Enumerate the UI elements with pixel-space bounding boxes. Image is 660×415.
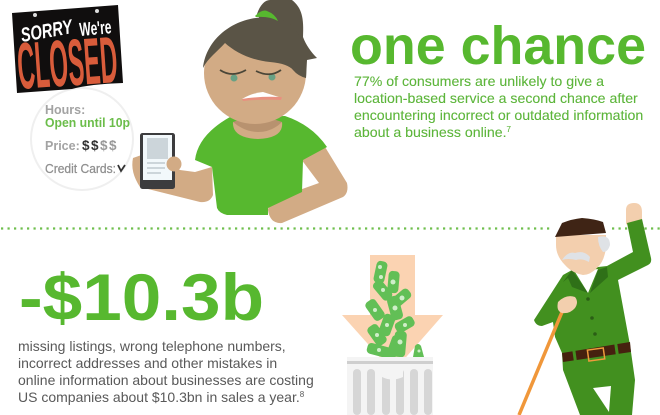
text: price: $$ [100,138,118,153]
text: losses description: 8 [300,390,305,399]
infographic canvas: CLOSED [15,22,120,103]
raised hand [626,203,642,226]
text: losses description: missing listings, wrong telephone numbers, [18,338,286,354]
icon: sorry we're closed sign [12,5,123,103]
money bills [364,260,424,360]
phone [140,133,175,189]
thumb [166,156,182,172]
head [556,235,606,275]
icon: sorry we're closed sign: We're [79,17,112,41]
right arm [268,142,348,223]
gap between legs [593,386,611,412]
neck [233,122,282,139]
cane [519,312,562,415]
illustration: old man with cane [519,203,651,415]
icon: sorry we're closed sign: SORRY [19,16,75,47]
text: one chance description: location-based service a second chance after [354,90,638,106]
text: one chance description: 7 [507,125,512,134]
trash can [347,357,433,415]
eyes [230,74,238,82]
hat [555,218,606,237]
arrow [342,255,443,372]
text: one chance description: encountering incorrect or outdated information [354,107,643,123]
moustache [562,252,590,262]
text: losses description: incorrect addresses and other mistakes in [18,355,277,371]
ponytail [257,0,317,78]
collar [563,270,588,293]
label: hours: Hours: [45,103,85,117]
white side hair [598,236,610,252]
text: losses description: US companies about $10.3bn in sales a year. [18,389,300,405]
text: price: $$ [82,138,100,153]
white gap behind hat on dotted line [553,222,612,234]
green shirt [195,116,327,215]
hair [203,17,306,78]
text: one chance description: about a business online. [354,124,507,140]
torso and raised arm [534,219,651,415]
heading: minus 10.3b: -$10.3b [19,260,264,334]
mouth [242,92,282,99]
head [204,22,306,124]
text: losses description: online information about businesses are costing [18,372,314,388]
left arm holding phone [132,152,213,202]
magnifier: business details [31,88,133,190]
illustration: frustrated woman with phone [132,0,348,223]
hand on cane [558,296,577,313]
icon: arrow into trash with money [342,255,443,415]
text: price: Price: [45,139,80,153]
buttons [586,297,590,301]
heading: one chance: one chance [350,16,646,76]
hair band [255,11,278,21]
text: one chance description: 77% of consumers are unlikely to give a [354,73,604,89]
belt [562,342,631,362]
text: open until: Open until 10p [45,115,130,130]
text: credit cards: Credit Cards: [45,162,116,176]
